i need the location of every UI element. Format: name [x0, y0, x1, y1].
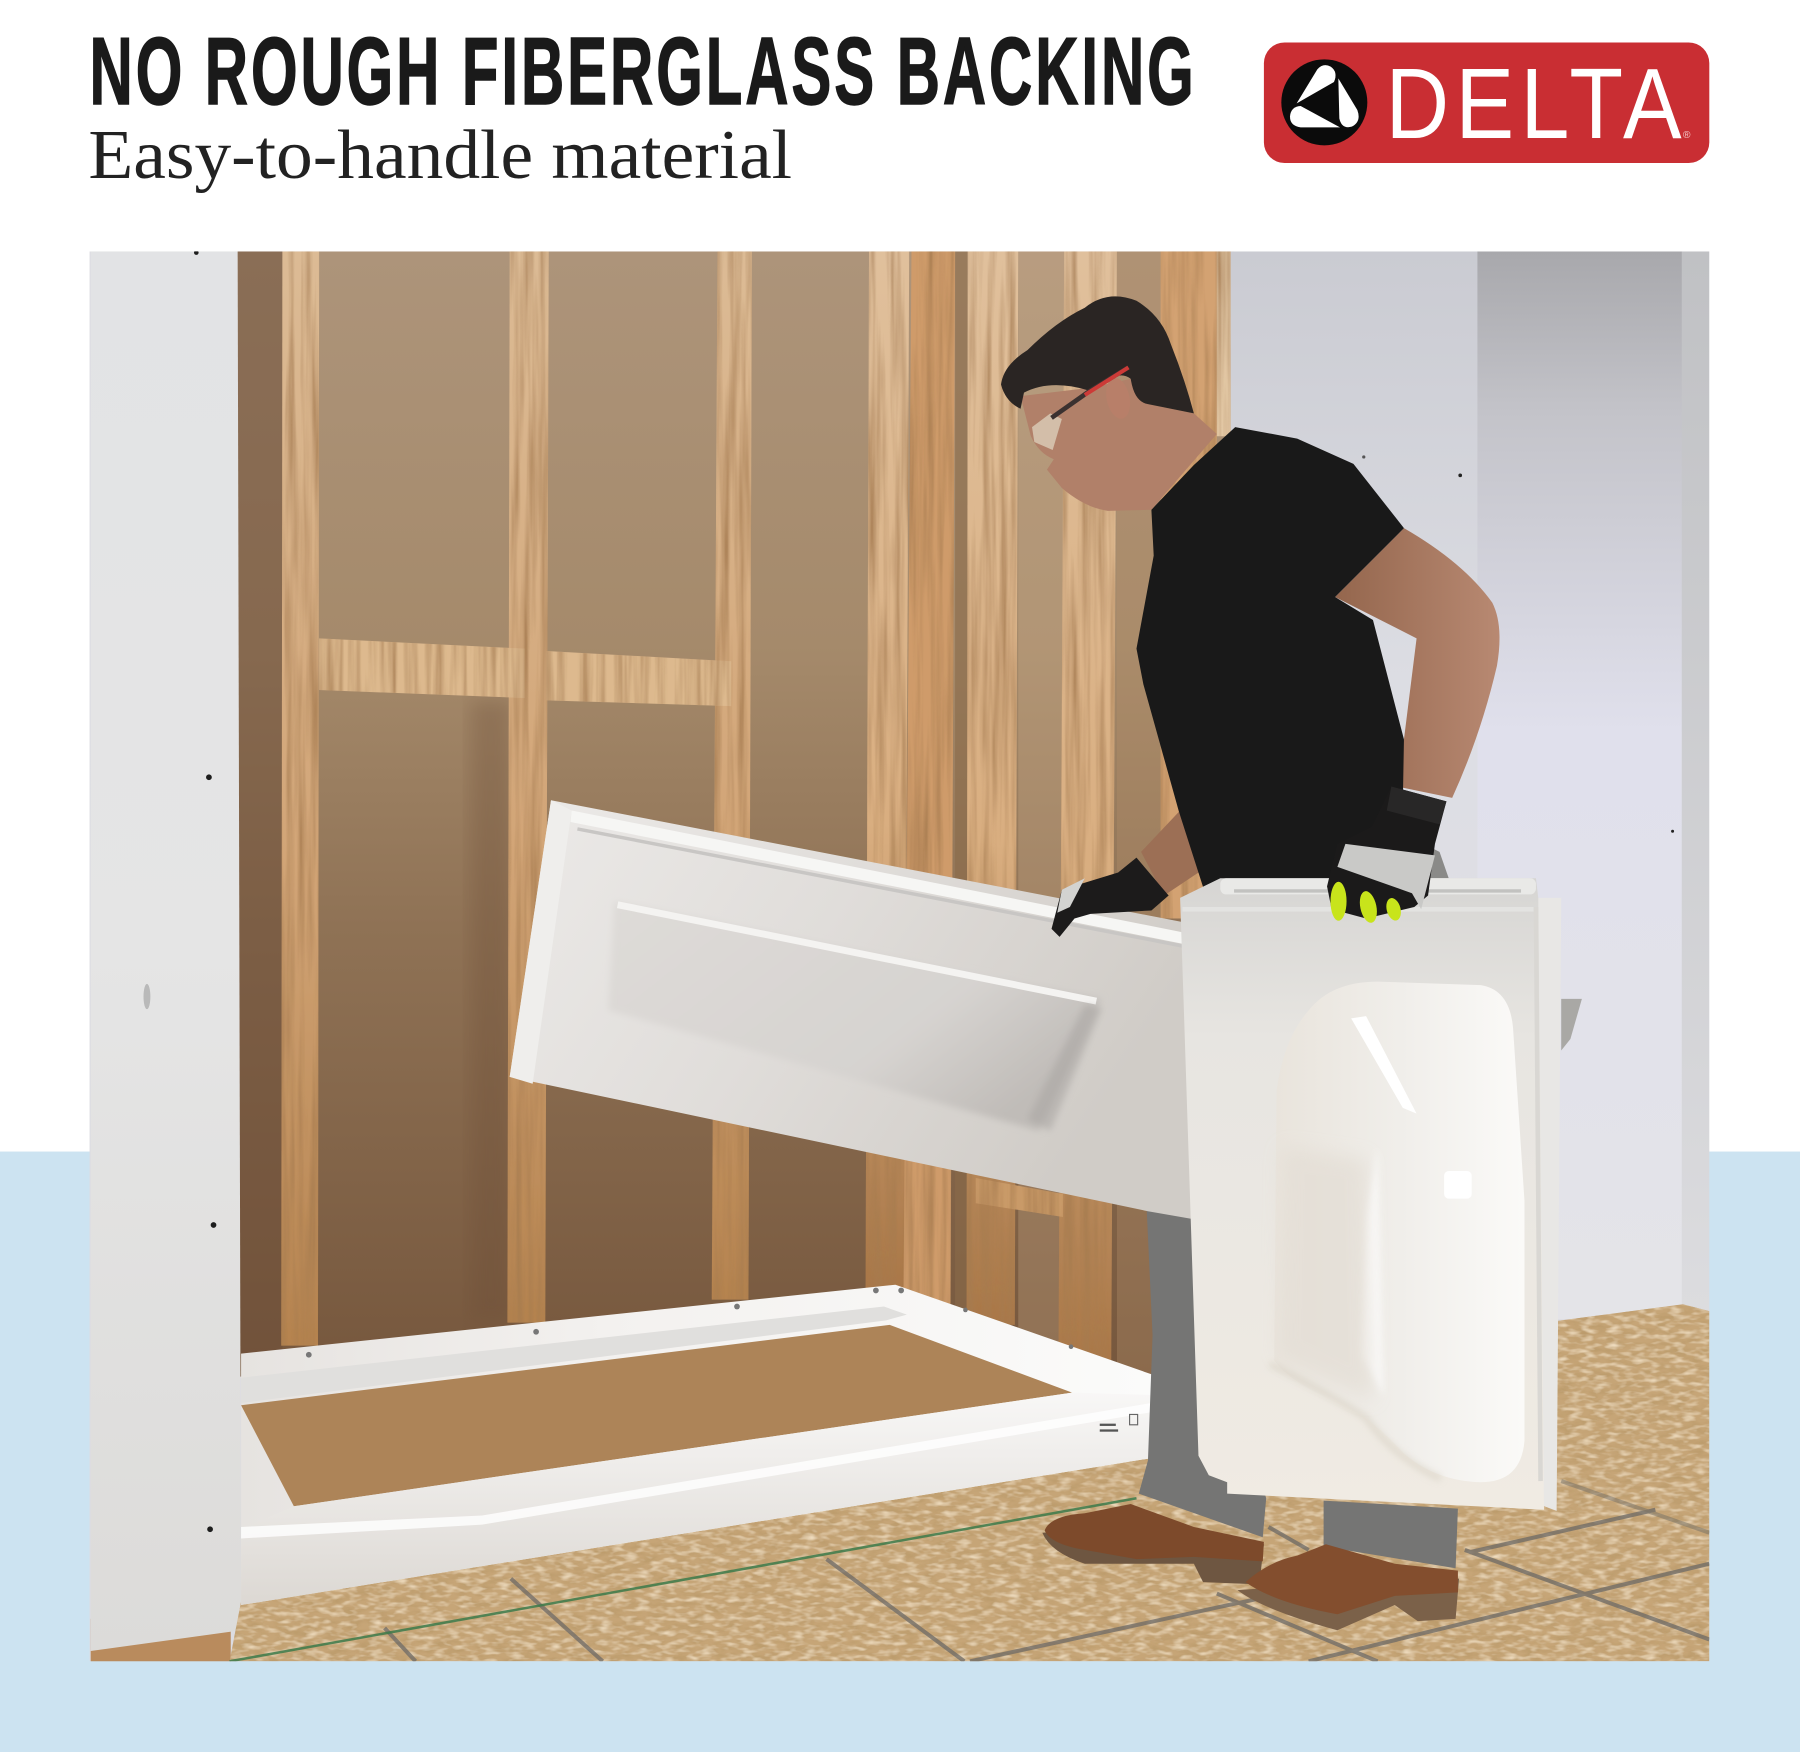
person: right glove	[1327, 786, 1446, 924]
glove wrist strap	[1387, 786, 1446, 824]
floor chalk lines	[385, 1481, 1709, 1661]
person: left boot	[1042, 1504, 1264, 1584]
wood studs	[281, 251, 1231, 1366]
panel edge flange	[510, 800, 572, 1084]
tray label	[1100, 1414, 1138, 1432]
glove yellow grips	[1330, 882, 1403, 924]
kraft backing wall	[235, 251, 1234, 1377]
person: left forearm	[1141, 812, 1202, 896]
pale blue background band	[0, 1152, 1800, 1752]
shower base tray	[241, 1285, 1151, 1605]
panel second rim	[577, 829, 1182, 946]
panel bulge soft shade	[1280, 1148, 1372, 1401]
photo: installer carrying shower panels	[90, 250, 1709, 1665]
panel small highlight	[1444, 1171, 1472, 1199]
panel side flange	[1534, 898, 1561, 1511]
panel specular highlight	[1351, 1016, 1417, 1114]
panel bulge lower edge shadow	[1270, 1364, 1441, 1479]
panel top highlight	[571, 811, 1182, 944]
right drywall panels	[1230, 252, 1710, 1152]
person: hair	[1001, 296, 1194, 413]
tray front highlight	[241, 1403, 1151, 1538]
panel shell	[1180, 878, 1544, 1510]
panel recess ridge	[618, 905, 1096, 1001]
vertical wall panel	[1180, 878, 1582, 1511]
person: right boot	[1238, 1544, 1459, 1630]
panel shell	[510, 800, 1194, 1219]
horizontal wall panel	[510, 800, 1194, 1219]
panel molded recess	[608, 901, 1102, 1131]
tray back rim line	[298, 1306, 906, 1394]
person: face and neck	[1021, 379, 1217, 511]
tray front face	[241, 1393, 1151, 1605]
panel right rib	[1536, 907, 1541, 1481]
person: right arm	[1335, 528, 1500, 798]
person: black t-shirt	[1136, 427, 1404, 901]
person: left glove	[1052, 858, 1169, 937]
logo wordmark: DELTA	[1386, 48, 1682, 159]
tray kraft protective sheet	[241, 1325, 1072, 1506]
tray body	[241, 1285, 1151, 1605]
panel molded bulge	[1274, 982, 1524, 1482]
wood sill under left drywall	[91, 1619, 231, 1665]
panel recess shadow	[1027, 1005, 1102, 1131]
logo emblem	[1281, 59, 1367, 145]
Delta logo	[1264, 42, 1709, 163]
OSB subfloor	[230, 1304, 1709, 1661]
wall shadow areas	[238, 251, 1161, 1377]
subtitle: Easy-to-handle material	[88, 117, 792, 194]
panel top tabs	[1182, 878, 1536, 912]
panel bulge highlight band	[1360, 1148, 1383, 1395]
person: safety glasses	[1032, 367, 1128, 450]
wood cross blocks	[319, 638, 731, 706]
floor green chalk line	[230, 1498, 1136, 1661]
panel clip	[1561, 999, 1582, 1051]
logo red badge	[1264, 42, 1709, 163]
person: trousers	[1139, 844, 1458, 1568]
tray screws	[306, 1288, 1073, 1358]
person: ear	[1103, 376, 1134, 421]
registered mark: ®	[1683, 130, 1691, 141]
left drywall panel	[91, 250, 241, 1651]
glove grey patch	[1337, 844, 1435, 909]
title: NO ROUGH FIBERGLASS BACKING	[90, 18, 1194, 124]
